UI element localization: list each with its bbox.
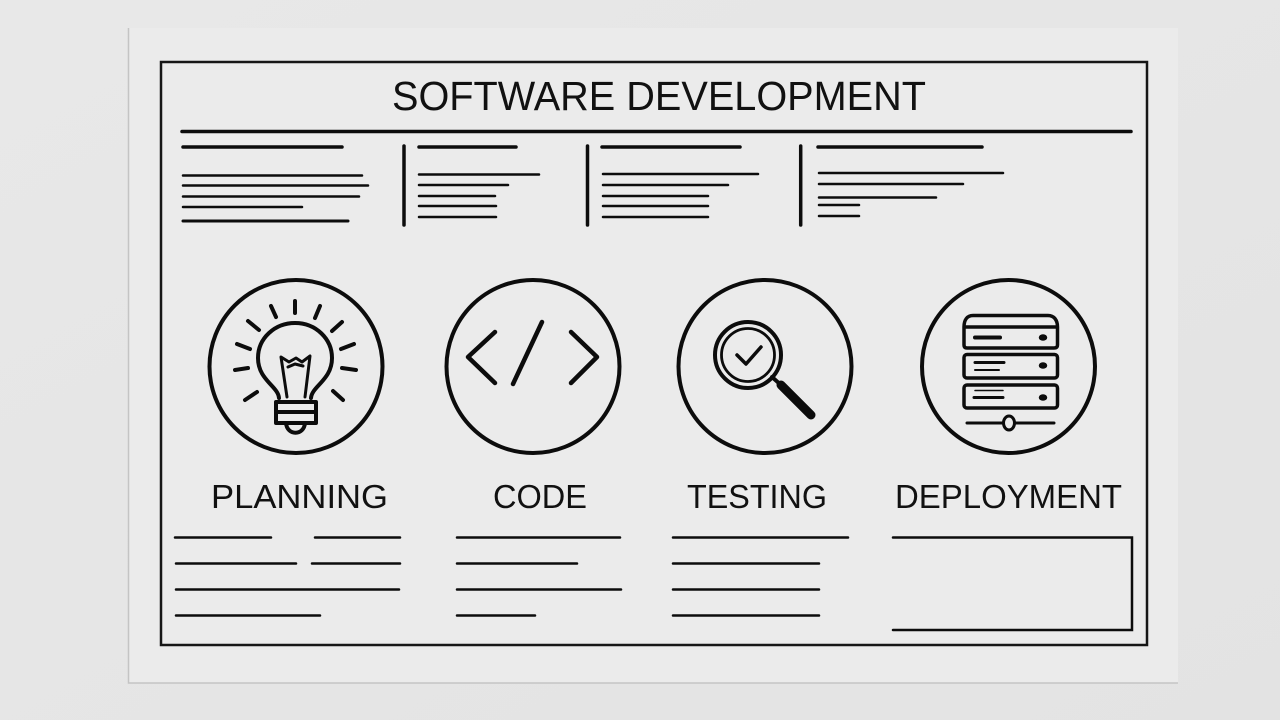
paper sheet: [128, 28, 1178, 683]
label: testing: TESTING: [687, 478, 827, 515]
label: planning: PLANNING: [211, 478, 388, 515]
text block: code: [457, 538, 621, 616]
divider 1: [402, 146, 406, 225]
text block: planning: [175, 538, 400, 616]
text block: column 1: [183, 147, 368, 221]
label: code: CODE: [493, 478, 587, 515]
header rule: [182, 130, 1131, 133]
divider 3: [799, 146, 802, 225]
icon: code brackets: [446, 280, 620, 453]
label: deployment: DEPLOYMENT: [895, 478, 1122, 515]
icon: light bulb: [210, 280, 382, 453]
text block: testing: [673, 538, 848, 616]
icon: magnifier with check: [678, 280, 852, 453]
deployment box: [893, 538, 1132, 630]
text block: column 4: [818, 147, 1003, 216]
text block: column 2: [419, 147, 539, 217]
divider 2: [586, 146, 589, 225]
icon: server stack: [922, 280, 1095, 453]
title: SOFTWARE DEVELOPMENT: [392, 73, 926, 119]
outer frame: [161, 62, 1147, 645]
text block: column 3: [602, 147, 758, 217]
